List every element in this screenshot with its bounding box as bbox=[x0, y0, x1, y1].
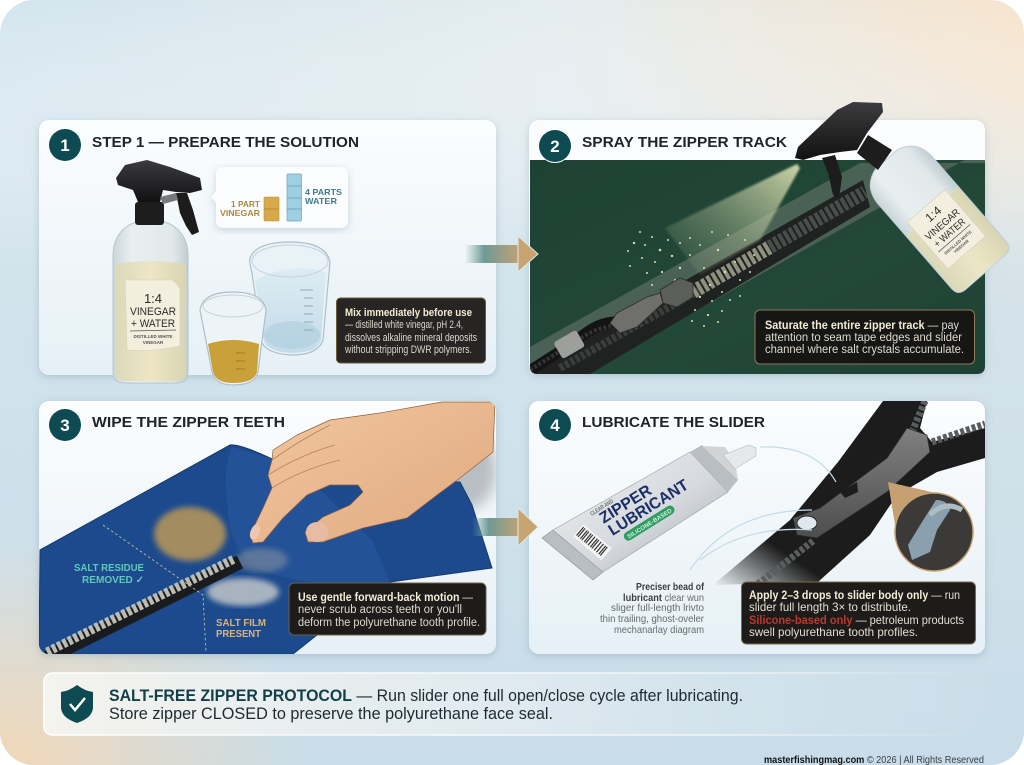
black zipper bbox=[713, 401, 985, 585]
vinegar ratio label: 1 PART bbox=[231, 199, 261, 209]
caption: saturate the track: attention to seam tape edges and slider bbox=[765, 332, 962, 344]
cloth fold bbox=[226, 447, 390, 584]
note: bead of lubricant bbox=[600, 581, 704, 636]
blue microfiber cloth bbox=[39, 445, 492, 654]
tube brand text: SILICONE-BASED bbox=[627, 508, 674, 540]
banner text bbox=[109, 686, 743, 723]
caption: mix immediately: — distilled white vinegar, pH 2.4, bbox=[345, 319, 463, 331]
panel: step 4 lubricate the slider bbox=[529, 401, 985, 654]
zipper slider with pull tab bbox=[793, 428, 930, 538]
caption: gentle motion: Use gentle forward-back motion — bbox=[298, 592, 473, 604]
water ratio label: WATER bbox=[305, 196, 337, 206]
step 4 heading: LUBRICATE THE SLIDER bbox=[582, 415, 766, 431]
icon: zipper lubricant tube bbox=[542, 445, 756, 580]
water ratio label: 4 PARTS bbox=[305, 187, 342, 197]
caption: apply drops: slider full length 3× to distribute. bbox=[749, 600, 911, 614]
tilted bottle label: VINEGAR bbox=[923, 207, 962, 243]
zipper slider and pull bbox=[610, 278, 693, 333]
step 2 badge: 2 bbox=[550, 137, 560, 156]
zipper track and teeth bbox=[530, 180, 870, 374]
step 1 heading: STEP 1 — PREPARE THE SOLUTION bbox=[92, 135, 359, 151]
arrow: step 1 to step 2 bbox=[465, 236, 538, 272]
vinegar ratio label: VINEGAR bbox=[220, 208, 260, 218]
caption: saturate the track: Saturate the entire zipper track — pay bbox=[765, 320, 959, 332]
note: bead of lubricant: lubricant clear wun bbox=[623, 592, 704, 604]
caption: mix immediately: dissolves alkaline mineral deposits bbox=[345, 332, 477, 344]
label: salt residue removed: REMOVED ✓ bbox=[82, 575, 144, 586]
tilted bottle label: + WATER bbox=[932, 217, 968, 250]
caption: saturate the track: channel where salt crystals accumulate. bbox=[765, 344, 964, 356]
step 3 badge bbox=[49, 409, 81, 441]
zipper teeth bbox=[758, 401, 985, 584]
zipper tape bbox=[530, 160, 985, 374]
note: bead of lubricant: sliger full-length lrivto bbox=[611, 602, 704, 614]
salt residue patch bbox=[154, 507, 226, 561]
note: bead of lubricant: thin trailing, ghost-oveler bbox=[600, 613, 704, 625]
water ratio block bbox=[287, 174, 302, 221]
tilted bottle label: 1:4 bbox=[922, 203, 944, 225]
panel: step 2 spray the zipper track bbox=[528, 102, 1012, 374]
caption: mix immediately: Mix immediately before use bbox=[345, 307, 472, 319]
icon: spray bottle with vinegar solution bbox=[113, 160, 202, 383]
tube barcode bbox=[573, 524, 612, 560]
step 1 badge: 1 bbox=[60, 136, 70, 155]
step 2 badge bbox=[538, 129, 572, 163]
residue on cloth under fingers bbox=[236, 548, 288, 572]
blue cloth and zipper scene bbox=[39, 402, 497, 658]
bottle label 1:4 vinegar + water: DISTILLED WHITE bbox=[134, 334, 172, 339]
caption: gentle motion: deform the polyurethane tooth profile. bbox=[298, 617, 480, 629]
banner text: Store zipper CLOSED to preserve the polyurethane face seal. bbox=[109, 704, 553, 723]
label: salt residue removed: SALT RESIDUE bbox=[74, 563, 144, 574]
tube brand text: LUBRICANT bbox=[606, 477, 692, 539]
caption: saturate the track bbox=[755, 310, 974, 364]
panel: step 1 prepare the solution bbox=[39, 120, 496, 385]
step 4 badge bbox=[539, 409, 571, 441]
note: bead of lubricant: mechanarlay diagram bbox=[614, 624, 704, 636]
bottle label 1:4 vinegar + water: 1:4 bbox=[144, 291, 162, 306]
tube brand text bbox=[590, 461, 697, 551]
tilted bottle label bbox=[907, 189, 986, 269]
bottle label 1:4 vinegar + water: + WATER bbox=[131, 318, 175, 330]
label: salt film present bbox=[216, 618, 266, 640]
inset detail circle with wedge bbox=[888, 482, 973, 571]
dashed leader lines bbox=[103, 525, 206, 652]
tilted bottle label: DISTILLED WHITE bbox=[943, 229, 973, 256]
banner: salt-free zipper protocol bbox=[44, 673, 985, 735]
bottle label 1:4 vinegar + water: VINEGAR bbox=[130, 306, 176, 318]
icon: tilted spray bottle bbox=[795, 102, 1012, 296]
caption: gentle motion bbox=[289, 583, 486, 635]
water ratio label bbox=[305, 187, 342, 206]
caption: apply drops: swell polyurethane tooth profiles. bbox=[749, 625, 918, 639]
step 3 heading: WIPE THE ZIPPER TEETH bbox=[92, 415, 285, 431]
caption: mix immediately bbox=[336, 298, 486, 363]
step 2 heading: SPRAY THE ZIPPER TRACK bbox=[582, 135, 788, 151]
label: salt film present: PRESENT bbox=[216, 629, 261, 640]
note: bead of lubricant: Preciser bead of bbox=[636, 581, 704, 593]
callout: mixing ratio bbox=[211, 167, 348, 228]
green fabric with zipper bbox=[530, 160, 985, 374]
vinegar ratio label bbox=[220, 199, 261, 218]
caption: mix immediately: without stripping DWR polymers. bbox=[344, 344, 472, 356]
panel: step 3 wipe the zipper teeth bbox=[39, 401, 497, 658]
salt film patch bbox=[207, 578, 279, 606]
lubricant flow lines bbox=[690, 447, 836, 570]
label: salt film present: SALT FILM bbox=[216, 618, 266, 629]
tube brand text: CLEAR AND bbox=[590, 499, 615, 518]
step 4 badge: 4 bbox=[550, 416, 560, 435]
step 3 badge: 3 bbox=[60, 416, 70, 435]
spray mist bbox=[627, 164, 800, 327]
caption: gentle motion: never scrub across teeth or you'll bbox=[298, 604, 462, 616]
hand bbox=[248, 402, 495, 543]
banner text: SALT-FREE ZIPPER PROTOCOL — Run slider one full open/close cycle after lubricating. bbox=[109, 686, 743, 705]
tilted bottle label: VINEGAR bbox=[953, 238, 970, 254]
icon: shield with check bbox=[61, 685, 93, 723]
label: salt residue removed bbox=[74, 563, 144, 586]
caption: apply drops bbox=[742, 582, 976, 644]
arrow: step 3 to step 4 bbox=[472, 508, 538, 546]
icon: small measuring cup of vinegar bbox=[200, 292, 266, 385]
caption: apply drops: Apply 2–3 drops to slider body only — run bbox=[749, 588, 960, 602]
step 1 badge bbox=[49, 129, 81, 161]
tube brand text: ZIPPER bbox=[597, 482, 655, 527]
vinegar ratio block bbox=[264, 197, 279, 221]
zipper teeth strip bbox=[47, 559, 240, 658]
icon: large measuring cup of water bbox=[250, 242, 330, 355]
zipper cord with metal stop bbox=[528, 322, 625, 372]
bottle label 1:4 vinegar + water: VINEGAR bbox=[143, 340, 164, 345]
bottle label 1:4 vinegar + water bbox=[125, 280, 180, 350]
caption: apply drops: Silicone-based only — petroleum products bbox=[749, 613, 964, 627]
